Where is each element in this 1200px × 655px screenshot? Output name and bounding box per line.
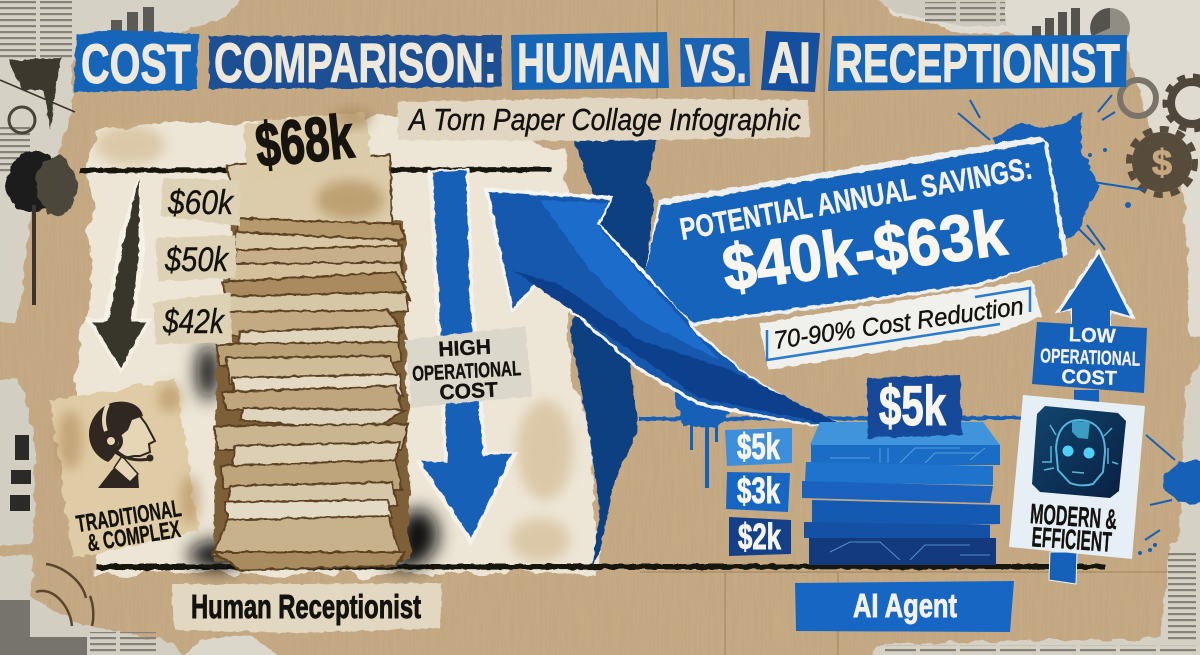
book stack chart xyxy=(802,422,1000,565)
title word: VS.: VS. xyxy=(685,34,747,94)
panel: potential annual savings xyxy=(644,136,1068,326)
label: AI agent: AI Agent xyxy=(853,587,957,624)
cost tag: $68k: $68k xyxy=(252,102,357,181)
note: high operational cost xyxy=(405,326,532,408)
top axis line xyxy=(80,167,552,173)
title xyxy=(74,30,1127,96)
ink blots left xyxy=(6,58,76,305)
label: human receptionist xyxy=(172,583,442,633)
note: traditional and complex: & COMPLEX xyxy=(85,516,182,557)
arrow: low operational cost up arrow: LOW xyxy=(1069,324,1116,348)
panel: potential annual savings: POTENTIAL ANNUAL SAVINGS: xyxy=(677,150,1035,247)
icon: gears: $ xyxy=(1152,142,1172,183)
icon: newspaper bar chart left xyxy=(111,7,154,35)
arrow: blue down arrow xyxy=(414,168,518,546)
arrow: dark down arrow xyxy=(85,172,152,374)
note: 70-90% cost reduction: 70-90% Cost Reduction xyxy=(772,292,1025,355)
card: modern and efficient xyxy=(1009,395,1145,559)
arrow: torn blue diagonal arrow xyxy=(484,188,858,431)
cost tag: AI $2k: $2k xyxy=(738,516,782,557)
cost tag: AI $3k: $3k xyxy=(737,470,781,511)
icon: newspaper charts right xyxy=(1032,8,1130,48)
arrow: low operational cost up arrow xyxy=(1032,248,1147,584)
title word: COMPARISON: COMPARISON: xyxy=(214,31,497,94)
panel: potential annual savings: $40k-$63k xyxy=(718,195,1011,305)
cost tag: $60k: $60k xyxy=(167,184,235,222)
title word: AI: AI xyxy=(768,31,811,96)
icon: human with headset xyxy=(89,402,155,488)
arrow: low operational cost up arrow: OPERATIONAL xyxy=(1040,345,1141,371)
blue splatter right xyxy=(958,95,1200,555)
icon: robot head xyxy=(1032,406,1126,498)
subtitle strip: A Torn Paper Collage Infographic xyxy=(407,102,801,137)
cost tag: AI $5k top: $5k xyxy=(879,374,947,437)
cost tag: $42k xyxy=(153,293,232,344)
bottom axis line xyxy=(96,564,1105,570)
card: modern and efficient: MODERN & xyxy=(1029,498,1118,535)
note: traditional and complex xyxy=(50,379,200,558)
title word: COST: COST xyxy=(81,32,191,95)
note: high operational cost: COST xyxy=(439,378,499,405)
paper stack chart xyxy=(212,155,410,570)
note: traditional and complex: TRADITIONAL xyxy=(74,495,183,538)
note: 70-90% cost reduction xyxy=(759,280,1042,370)
blue splatter line and drips xyxy=(638,385,1022,488)
label: human receptionist: Human Receptionist xyxy=(191,588,421,625)
title word: HUMAN: HUMAN xyxy=(517,31,661,94)
cost tag: $42k: $42k xyxy=(162,303,226,341)
ink splatter around stack xyxy=(189,344,438,569)
icon: gears xyxy=(1120,76,1200,195)
note: high operational cost: OPERATIONAL xyxy=(412,357,522,386)
arrow: low operational cost up arrow: COST xyxy=(1061,366,1117,390)
card: modern and efficient: EFFICIENT xyxy=(1031,521,1113,558)
label: AI agent xyxy=(795,581,1014,632)
cost tag: AI $5k: $5k xyxy=(737,426,781,467)
coffee ring stains xyxy=(36,564,93,626)
panel: central torn paper xyxy=(78,120,600,574)
torn dark blue strip xyxy=(570,140,657,566)
note: high operational cost: HIGH xyxy=(438,336,491,361)
cost tag: $50k: $50k xyxy=(164,241,230,279)
